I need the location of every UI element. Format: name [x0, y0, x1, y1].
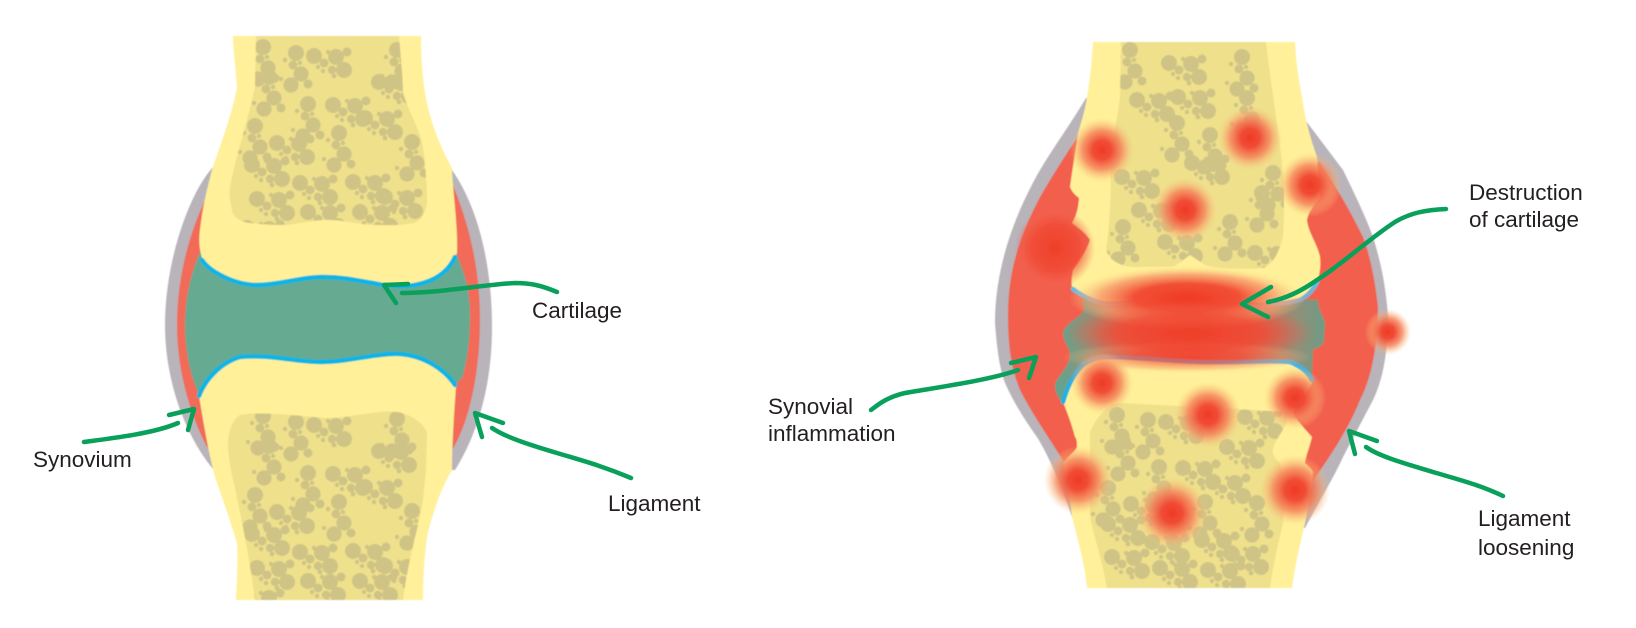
label: Destruction of cartilage: of cartilage	[1469, 207, 1579, 232]
label: Ligament loosening: Ligament	[1478, 506, 1571, 531]
damaged synovial fluid	[1055, 290, 1325, 402]
lower bone	[199, 354, 456, 628]
inflammation in joint space	[1065, 303, 1315, 363]
upper damaged cartilage line	[1073, 282, 1317, 305]
eroded lower bone	[1063, 357, 1313, 592]
arrow: ligament loosening	[1349, 431, 1503, 496]
inflammation along upper bone end	[1069, 266, 1305, 330]
ligament capsule	[165, 165, 492, 477]
label: Synovial inflammation: Synovial	[768, 394, 853, 419]
arrow: synovium	[84, 409, 194, 442]
lower cartilage line	[199, 354, 455, 396]
label: Synovial inflammation: inflammation	[768, 421, 896, 446]
upper bone	[199, 36, 457, 286]
upper cartilage line	[202, 257, 455, 286]
panel: inflamed joint	[995, 42, 1411, 592]
lower damaged cartilage line	[1063, 357, 1312, 402]
arrow: ligament	[475, 413, 631, 478]
synovial fluid	[185, 252, 470, 392]
inflamed synovium	[1008, 137, 1378, 485]
arrow: synovial inflammation	[871, 357, 1036, 410]
label: Synovium: Synovium	[33, 447, 132, 472]
arrow: destruction of cartilage	[1242, 209, 1446, 317]
label: Ligament loosening: loosening	[1478, 535, 1574, 560]
label: Ligament: Ligament	[608, 491, 701, 516]
label: Cartilage: Cartilage	[532, 298, 622, 323]
inflammation along lower bone end	[1062, 341, 1312, 373]
panel: healthy joint	[165, 36, 492, 628]
inflammation spots	[1015, 106, 1411, 548]
eroded upper bone	[1070, 42, 1320, 305]
loosened ligament capsule	[995, 98, 1388, 528]
arrow: cartilage	[384, 283, 557, 303]
label: Destruction of cartilage: Destruction	[1469, 180, 1583, 205]
synovium	[177, 178, 480, 450]
